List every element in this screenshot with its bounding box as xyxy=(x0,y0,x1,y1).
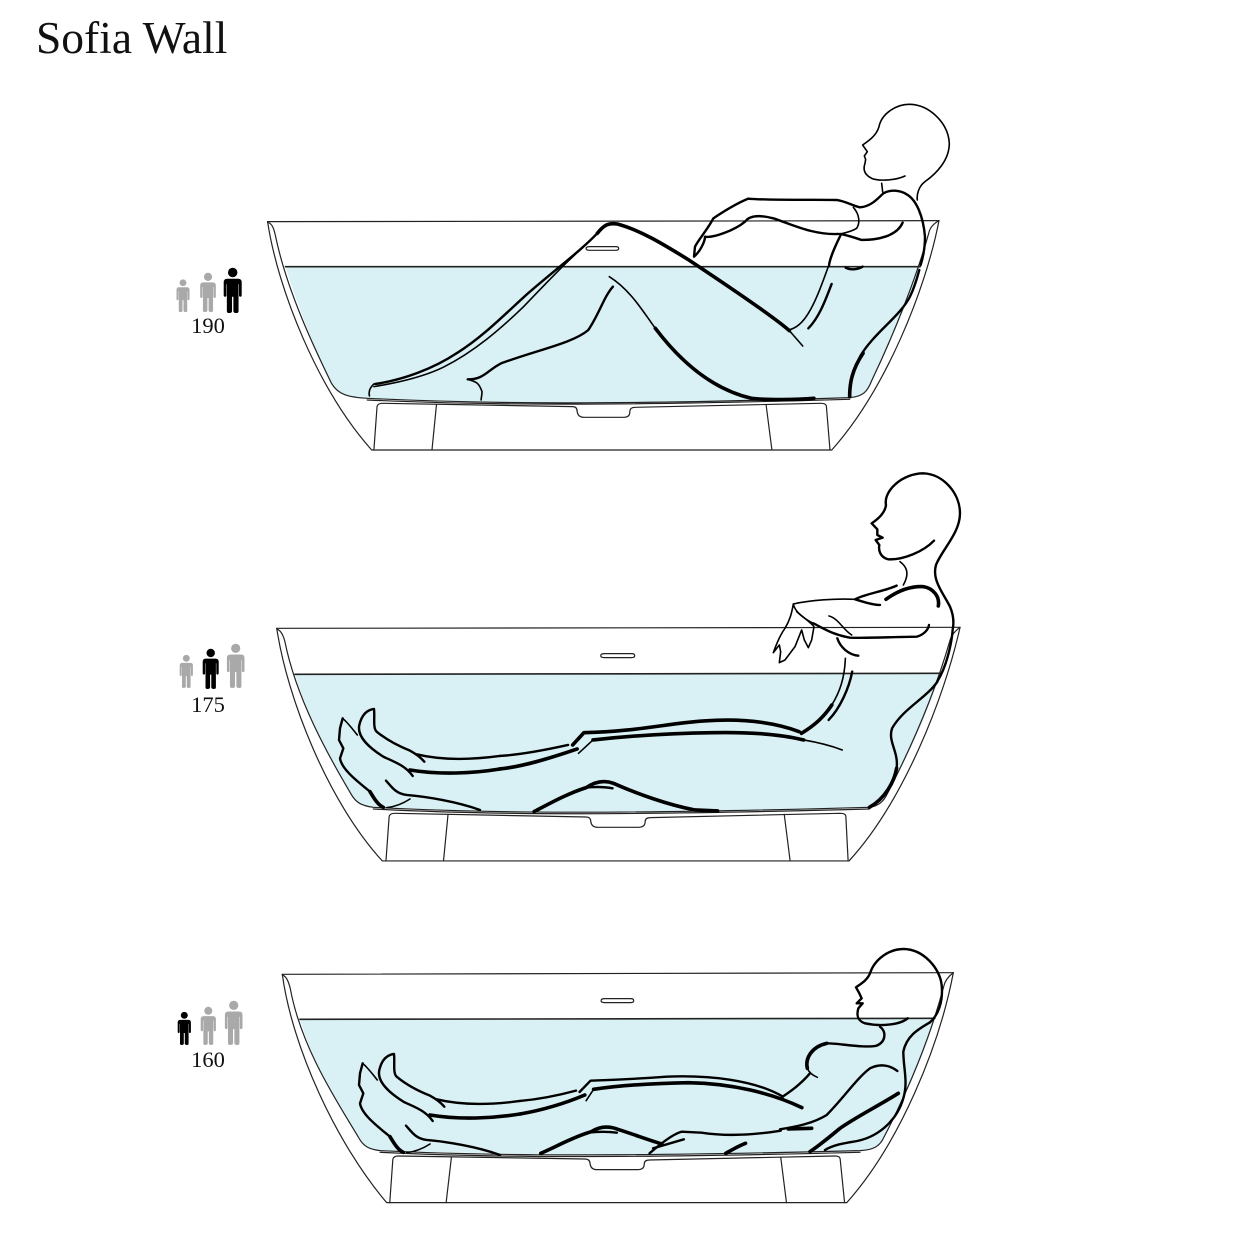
label 160: 160 xyxy=(191,1047,225,1072)
label 175: 175 xyxy=(191,692,225,717)
upper body and head xyxy=(780,949,942,1152)
feet xyxy=(339,709,500,810)
lower body and legs xyxy=(369,224,863,400)
feet xyxy=(359,1054,520,1155)
upper body, head and arm xyxy=(694,104,949,357)
bathtub 175 with water xyxy=(277,627,960,861)
bathtub 160 with water xyxy=(282,973,953,1203)
figure reclining with legs extended xyxy=(339,473,960,812)
figure lying fully submerged xyxy=(359,949,942,1155)
height icons: 160 xyxy=(178,1001,242,1045)
figure reclining with knees up xyxy=(369,104,949,400)
panel: height 175 bathtub xyxy=(277,473,960,861)
torso and legs xyxy=(500,658,937,812)
legs and lower arm xyxy=(520,1076,802,1153)
panel: height 160 bathtub xyxy=(282,949,953,1203)
panel: height 190 bathtub xyxy=(268,104,949,450)
bathtub 190 with water xyxy=(268,221,939,450)
upper body, head and hand xyxy=(773,473,960,681)
title: Sofia Wall xyxy=(36,12,227,63)
height icons: 190 xyxy=(176,268,242,313)
label 190: 190 xyxy=(191,313,225,338)
height icons: 175 xyxy=(180,644,244,689)
